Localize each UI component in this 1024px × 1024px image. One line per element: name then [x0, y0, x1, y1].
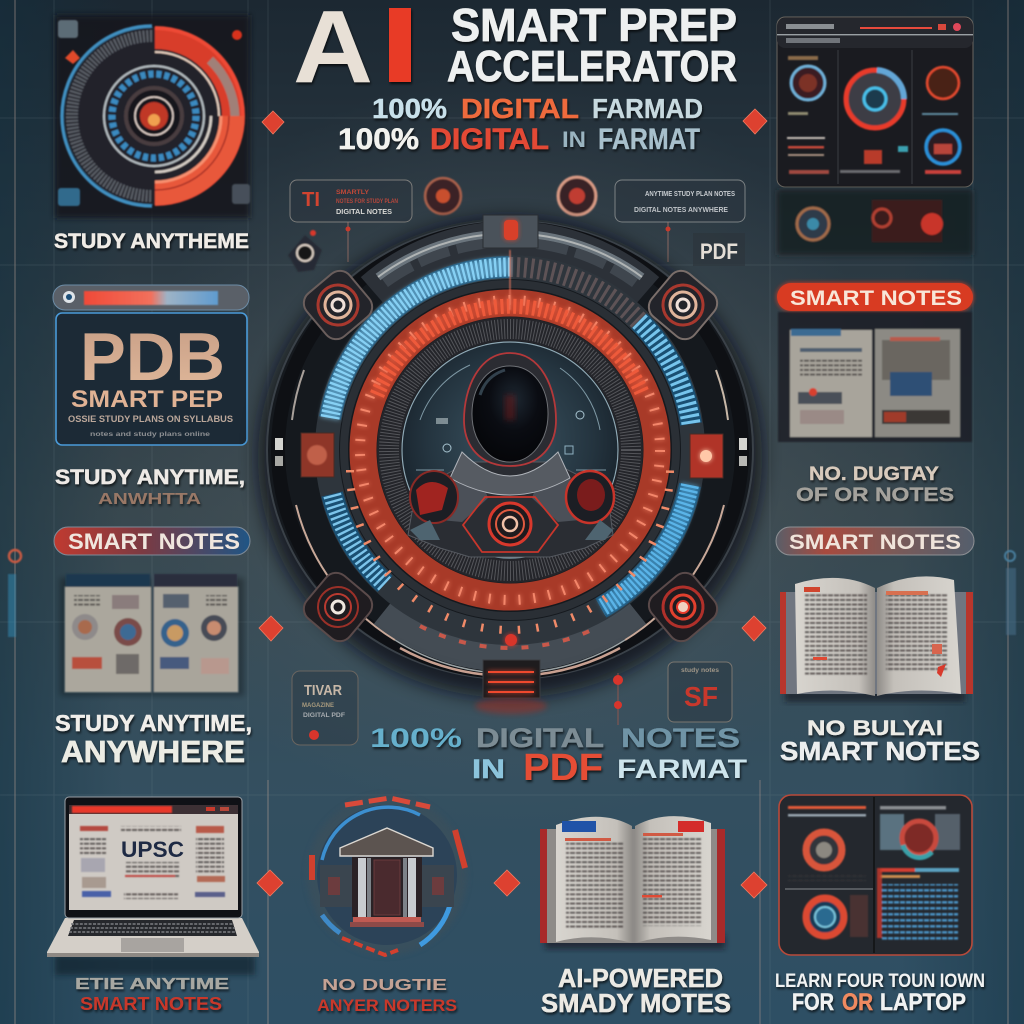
- figure: armored astronaut: [408, 353, 614, 557]
- label: STUDY ANYTIME,: [55, 466, 245, 489]
- PDF tag: PDF: [700, 239, 738, 264]
- label: FOR: [792, 989, 834, 1016]
- panel: PDB smart prep: [53, 285, 249, 508]
- label: SMART NOTES: [80, 994, 222, 1014]
- panel: smart notes left: [54, 527, 252, 769]
- card: SMART PEP: [71, 386, 223, 413]
- title: product name: ACCELERATOR: [447, 42, 737, 91]
- label: [796, 464, 954, 506]
- label: [55, 466, 245, 508]
- ring top box: [483, 215, 538, 310]
- icon: notes book: [778, 312, 972, 442]
- panel: small box bottom left: [292, 671, 358, 745]
- icon: open book: [540, 816, 725, 949]
- icon: open book: [780, 576, 973, 702]
- label: [75, 976, 229, 1014]
- subtitle line two: [338, 123, 700, 156]
- panel: laptop: [47, 797, 259, 1014]
- panel: info box right top: ANYTIME STUDY PLAN NOTES: [645, 191, 735, 198]
- panel: smart notes right top: [777, 283, 973, 506]
- heading: digital notes: [370, 723, 748, 789]
- panel: info box right top: [615, 180, 745, 222]
- label: OF OR NOTES: [796, 485, 954, 506]
- ring right box: [690, 434, 747, 478]
- subtitle line two: FARMAT: [598, 123, 700, 156]
- icon: laptop: UPSC: [121, 837, 184, 862]
- label: LAPTOP: [880, 989, 966, 1016]
- collar: [450, 452, 570, 495]
- panel: small box bottom left: MAGAZINE: [302, 703, 334, 709]
- hatched inner ring: [389, 329, 631, 571]
- panel: AI-powered notes book: [540, 816, 731, 1018]
- ring bottom box: [475, 634, 547, 714]
- title: [293, 0, 737, 156]
- icon: analytics dashboard: [777, 17, 973, 187]
- panel: info box left top: DIGITAL NOTES: [336, 209, 392, 216]
- main circular dial: [258, 215, 762, 714]
- panel: info box left top: NOTES FOR STUDY PLAN: [336, 199, 398, 205]
- inner glass disc: [402, 342, 618, 558]
- panel: small box bottom right: [668, 662, 732, 722]
- heading: digital notes: IN: [472, 754, 505, 784]
- subtitle line one: DIGITAL: [461, 93, 579, 124]
- panel: info box left top: [290, 180, 412, 222]
- label: NO DUGTIE: [322, 977, 447, 994]
- label: ANYWHERE: [61, 734, 245, 769]
- icon: institution in ring: [307, 795, 467, 955]
- ring corner nodes: [299, 266, 722, 646]
- progress bar: [53, 285, 249, 310]
- label: [775, 971, 985, 1016]
- label: [55, 710, 252, 769]
- subtitle line one: [372, 93, 703, 124]
- panel: small box bottom left: TIVAR: [304, 682, 342, 699]
- card: PDB: [80, 319, 225, 395]
- lower arm plates: [410, 520, 440, 540]
- icon: laptop: [47, 797, 259, 975]
- title: product name: [447, 0, 737, 91]
- heading: digital notes: PDF: [523, 747, 603, 789]
- subtitle line one: 100%: [372, 93, 447, 124]
- label: [780, 717, 980, 766]
- chest highlight plates: [440, 470, 580, 522]
- PDF tag: [693, 233, 745, 266]
- panel: small box bottom left: DIGITAL PDF: [303, 713, 345, 719]
- torso: [408, 462, 613, 557]
- label: ETIE ANYTIME: [75, 976, 229, 993]
- node bottom-left: [299, 568, 377, 646]
- panel: small box bottom right: study notes: [681, 668, 720, 674]
- label: AI-POWERED: [558, 963, 723, 993]
- panel: building badge: [307, 795, 467, 1015]
- card: notes and study plans online: [90, 432, 211, 438]
- label: SMADY MOTES: [541, 988, 731, 1018]
- label: STUDY ANYTHEME: [54, 230, 249, 253]
- label: SMART NOTES: [780, 736, 980, 766]
- top and bottom segmented panels: [372, 233, 648, 673]
- title: AI mark: [293, 0, 411, 104]
- label: NO. DUGTAY: [809, 464, 939, 485]
- heading: digital notes: 100%: [370, 723, 462, 753]
- title: product name: SMART PREP: [451, 0, 737, 51]
- pill: [776, 527, 974, 555]
- outer ring: [267, 221, 753, 679]
- node top-left: [299, 266, 377, 344]
- subtitle line two: 100%: [338, 123, 419, 156]
- heading: digital notes: FARMAT: [617, 754, 748, 784]
- label: ANWHTTA: [98, 491, 202, 508]
- icon: tablet dashboard: [779, 795, 972, 955]
- heading: digital notes: DIGITAL: [476, 723, 604, 753]
- icon: secondary widgets: [777, 190, 973, 255]
- panel: dashboard top right: [777, 17, 973, 255]
- label: [317, 977, 457, 1015]
- icon: open notes: [60, 574, 244, 696]
- pill: SMART NOTES: [68, 529, 240, 554]
- panel: info box left top: SMARTLY: [336, 190, 369, 196]
- label: ANYER NOTERS: [317, 996, 457, 1015]
- connector lines: [346, 222, 670, 262]
- blue tick band: [327, 267, 693, 633]
- icon: connector diamonds: [257, 109, 767, 898]
- label: OR: [842, 989, 873, 1016]
- icon: corner chips: [58, 20, 250, 206]
- subtitle line one: FARMAD: [592, 93, 703, 124]
- label: NO BULYAI: [807, 717, 943, 740]
- panel: study dashboard bottom: [775, 795, 985, 1016]
- dial shadow: [258, 218, 762, 698]
- label: LEARN FOUR TOUN IOWN: [775, 971, 985, 992]
- panel: smart notes right lower: [776, 527, 980, 766]
- node top-right: [644, 266, 722, 344]
- panel: study anytime dial: [54, 15, 250, 253]
- subtitle line two: IN: [562, 127, 586, 152]
- panel: info box right top: DIGITAL NOTES ANYWHERE: [634, 207, 728, 214]
- panel: info box left top: TI: [302, 189, 320, 211]
- node bottom-right: [644, 568, 722, 646]
- subtitle line two: DIGITAL: [430, 123, 549, 156]
- shoulders: [410, 471, 614, 523]
- icon: eye button: [288, 230, 322, 272]
- icon: round knob right: [558, 177, 596, 215]
- card: [56, 313, 247, 445]
- card: OSSIE STUDY PLANS ON SYLLABUS: [68, 414, 233, 424]
- ring left box: [275, 433, 334, 477]
- label: STUDY ANYTIME,: [55, 710, 252, 736]
- visor: [472, 366, 548, 462]
- helmet: [464, 353, 556, 466]
- red glowing band: [344, 284, 676, 630]
- icon: side indicators: [8, 550, 1016, 637]
- pill: SMART NOTES: [789, 531, 961, 554]
- icon: round knob left: [425, 178, 461, 214]
- pill: SMART NOTES: [790, 287, 962, 310]
- visor glints: [480, 370, 505, 395]
- chest emblem: [463, 497, 558, 552]
- label: [541, 963, 731, 1018]
- heading: digital notes: NOTES: [621, 723, 740, 753]
- panel: small box bottom right: SF: [684, 681, 718, 712]
- icon: radar dial: [62, 26, 243, 206]
- icon: pin marker: [613, 673, 623, 725]
- pill: [777, 283, 973, 311]
